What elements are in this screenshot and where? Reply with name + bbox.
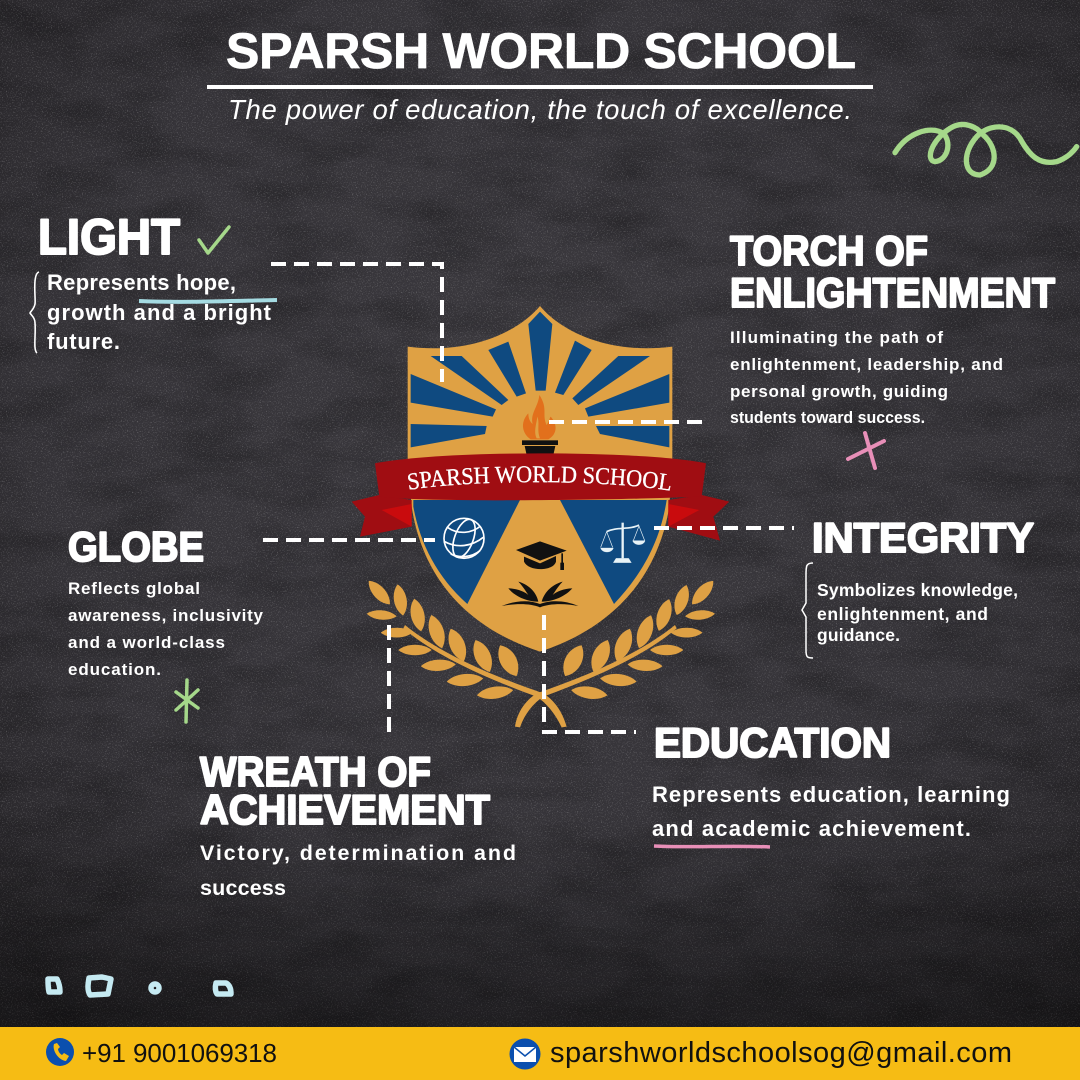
body text: Symbolizes knowledge, xyxy=(817,580,1018,600)
title block xyxy=(207,23,873,125)
icon: check mark xyxy=(199,227,229,253)
body text: personal growth, guiding xyxy=(730,382,948,401)
heading: INTEGRITY xyxy=(812,514,1034,561)
body text xyxy=(47,270,272,354)
body text: Illuminating the path of xyxy=(730,328,943,347)
connector: wreath xyxy=(387,625,391,733)
school name: SPARSH WORLD SCHOOL xyxy=(226,23,856,79)
body text xyxy=(200,841,516,900)
lower blue panels xyxy=(413,500,667,604)
sun rays xyxy=(411,312,669,447)
body text xyxy=(652,782,1010,841)
doodle: pink cross xyxy=(848,433,884,468)
body text: success xyxy=(200,876,286,900)
panel: torch of enlightenment xyxy=(730,227,1055,468)
body text: awareness, inclusivity xyxy=(68,606,264,625)
heading: EDUCATION xyxy=(654,719,891,766)
connector: light xyxy=(271,264,442,382)
connector: globe xyxy=(263,538,435,542)
body text: students toward success. xyxy=(730,408,925,427)
body text: Represents education, learning xyxy=(652,782,1010,807)
panel: globe xyxy=(68,523,264,722)
heading: GLOBE xyxy=(68,523,204,570)
connector: education xyxy=(544,615,636,732)
body text xyxy=(68,579,264,679)
panel: light xyxy=(30,209,277,354)
heading: TORCH OF xyxy=(730,227,928,274)
crest xyxy=(352,306,730,728)
phone number: +91 9001069318 xyxy=(82,1038,277,1068)
icon: phone xyxy=(46,1038,74,1066)
connector: integrity xyxy=(654,526,794,530)
bracket xyxy=(802,563,813,658)
torch xyxy=(522,395,558,455)
body text xyxy=(730,328,1003,427)
body text: and academic achievement. xyxy=(652,816,971,841)
icon: scales xyxy=(601,523,645,563)
icon: graduation cap xyxy=(516,541,567,570)
blue underline xyxy=(139,300,277,302)
footer bar xyxy=(0,1027,1080,1080)
panel: integrity xyxy=(802,514,1034,658)
heading: LIGHT xyxy=(38,209,180,265)
bracket xyxy=(30,272,39,353)
title underline xyxy=(207,85,873,89)
ribbon banner xyxy=(352,453,730,541)
body text: enlightenment, leadership, and xyxy=(730,355,1003,374)
tagline: The power of education, the touch of excellence. xyxy=(228,94,852,125)
connector: torch xyxy=(549,420,704,424)
heading: ACHIEVEMENT xyxy=(200,786,490,833)
icon: mail xyxy=(510,1038,540,1070)
doodle: green squiggle xyxy=(895,125,1077,175)
body text: enlightenment, and xyxy=(817,604,988,624)
body text: education. xyxy=(68,660,161,679)
body text: Represents hope, xyxy=(47,270,236,295)
doodle: green asterisk xyxy=(176,680,198,722)
email address: sparshworldschoolsog@gmail.com xyxy=(550,1037,1012,1069)
body text xyxy=(817,580,1018,645)
ribbon text: SPARSH WORLD SCHOOL xyxy=(408,466,670,491)
pink underline xyxy=(654,846,770,847)
icon: globe xyxy=(444,516,484,560)
heading: WREATH OF xyxy=(200,748,431,795)
body text: growth and a bright xyxy=(47,300,272,325)
body text: guidance. xyxy=(817,625,900,645)
panel: education xyxy=(652,719,1010,847)
body text: Reflects global xyxy=(68,579,200,598)
body text: Victory, determination and xyxy=(200,841,516,865)
wreath xyxy=(364,577,718,727)
body text: and a world-class xyxy=(68,633,225,652)
doodle: blue squares xyxy=(48,977,231,995)
heading xyxy=(200,748,490,833)
icon: open book xyxy=(502,582,578,607)
heading xyxy=(730,227,1055,316)
panel: wreath of achievement xyxy=(200,748,516,900)
body text: future. xyxy=(47,329,120,354)
shield xyxy=(408,306,672,652)
